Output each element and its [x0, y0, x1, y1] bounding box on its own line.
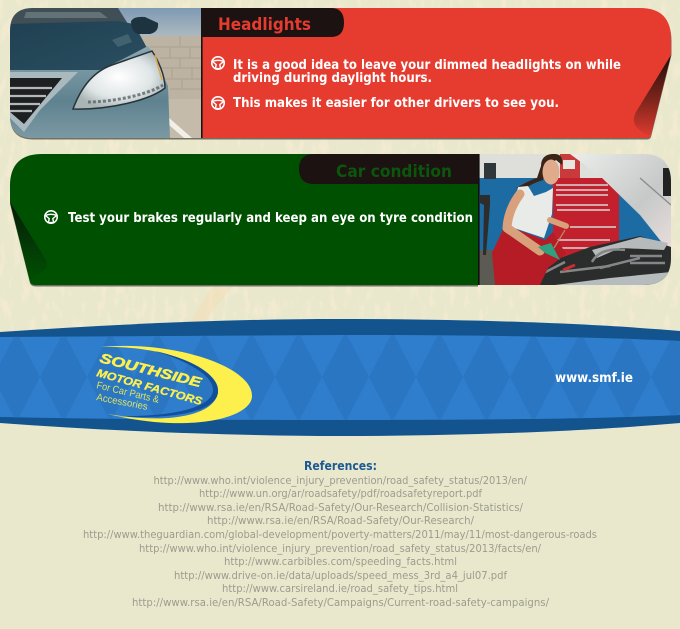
logo: southside motor factors: Accessories	[95, 392, 149, 413]
reference links: http://www.drive-on.ie/data/uploads/speed_mess_3rd_a4_jul07.pdf	[174, 570, 507, 582]
bullet: easier to see: This makes it easier for other drivers to see you.	[233, 95, 559, 111]
bullet: brakes and tyres: Test your brakes regularly and keep an eye on tyre condition	[68, 210, 473, 226]
website address: www.smf.ie	[555, 371, 633, 386]
footer banner	[0, 319, 680, 436]
reference links: http://www.who.int/violence_injury_prevention/road_safety_status/2013/en/	[154, 475, 527, 487]
banner diamond fill	[0, 335, 680, 420]
panel shadow	[10, 10, 672, 140]
bullet: dimmed headlights	[212, 57, 621, 86]
logo: southside motor factors: For Car Parts &	[95, 380, 160, 406]
reference links: http://www.who.int/violence_injury_prevention/road_safety_status/2013/facts/en/	[139, 543, 541, 555]
photo divider	[478, 154, 480, 285]
heading tab: car condition	[299, 154, 478, 184]
reference links: http://www.rsa.ie/en/RSA/Road-Safety/Campaigns/Current-road-safety-campaigns/	[132, 597, 549, 609]
tool cabinet	[553, 154, 619, 262]
panel: headlights	[10, 8, 672, 140]
logo: southside motor factors: SOUTHSIDE	[98, 350, 204, 390]
reference links: http://www.theguardian.com/global-development/poverty-matters/2011/may/11/most-dangerous-roads	[83, 529, 597, 541]
references heading: References:	[304, 458, 377, 473]
heading tab: headlights	[201, 8, 344, 37]
headlight lamp	[73, 51, 165, 109]
panel shadow	[10, 156, 478, 286]
panel: car condition	[10, 154, 672, 286]
car mirror	[131, 17, 158, 34]
bullet: dimmed headlights: It is a good idea to leave your dimmed headlights on while	[233, 57, 621, 73]
photo: car headlight	[10, 8, 201, 138]
page curl: bottom right	[634, 55, 671, 135]
red panel background	[201, 8, 671, 138]
references	[83, 458, 597, 609]
green panel background	[10, 154, 479, 285]
reference links: http://www.rsa.ie/en/RSA/Road-Safety/Our-Research/Collision-Statistics/	[158, 502, 523, 514]
reference links: http://www.un.org/ar/roadsafety/pdf/roadsafetyreport.pdf	[199, 488, 482, 500]
logo: southside motor factors	[95, 346, 252, 423]
reference links: http://www.carsireland.ie/road_safety_tips.html	[222, 583, 458, 595]
heading tab: headlights: Headlights	[218, 15, 311, 35]
logo: southside motor factors: MOTOR FACTORS	[95, 367, 204, 408]
mechanic woman	[492, 154, 566, 285]
reference links: http://www.rsa.ie/en/RSA/Road-Safety/Our-Research/	[207, 515, 474, 527]
car grille	[10, 78, 62, 124]
page curl: bottom left	[10, 202, 47, 281]
raised car bonnet	[570, 154, 671, 254]
reference links	[83, 475, 597, 609]
banner border	[0, 319, 680, 436]
bullet: dimmed headlights: driving during daylight hours.	[233, 70, 432, 86]
heading tab: car condition: Car condition	[336, 162, 452, 182]
photo: mechanic at work	[479, 154, 672, 285]
reference links: http://www.carbibles.com/speeding_facts.html	[224, 556, 457, 568]
engine bay	[540, 236, 671, 285]
photo divider	[201, 8, 203, 138]
